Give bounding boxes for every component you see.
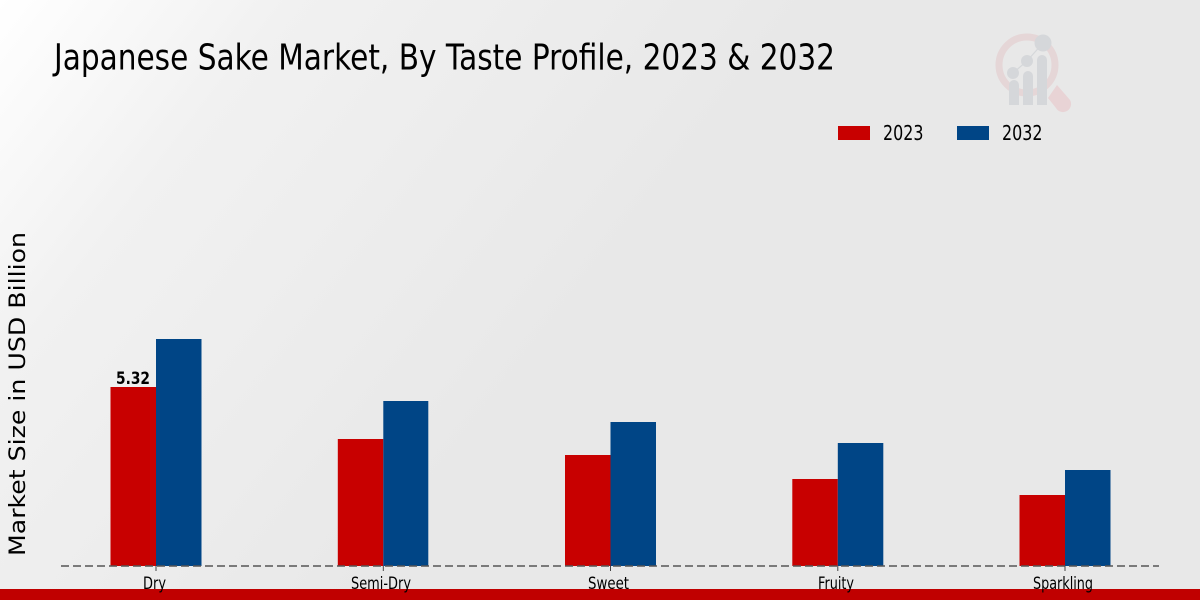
x axis baseline xyxy=(61,565,1159,567)
bars: Sparkling xyxy=(1020,470,1110,566)
category labels: Dry xyxy=(143,574,166,593)
y axis label: Market Size in USD Billion xyxy=(5,232,31,556)
category labels xyxy=(143,574,1093,593)
footer bar xyxy=(0,589,1200,600)
value label: 5.32 xyxy=(116,369,150,388)
category labels: Semi-Dry xyxy=(351,574,411,593)
legend xyxy=(838,121,1042,145)
bar chart xyxy=(61,339,1159,593)
bars: Fruity xyxy=(792,443,883,566)
category labels: Sweet xyxy=(588,574,629,593)
legend item: 2023 xyxy=(838,121,924,145)
icon: watermark logo xyxy=(999,34,1071,112)
bars: Sweet xyxy=(565,422,656,566)
legend item: 2032: 2032 xyxy=(1002,121,1042,145)
legend item: 2032 xyxy=(957,121,1042,145)
legend item: 2023: 2023 xyxy=(883,121,924,145)
title: Japanese Sake Market, By Taste Profile, 2023 & 2032 xyxy=(52,38,835,78)
category labels: Fruity xyxy=(818,574,854,593)
bars: Semi-Dry xyxy=(338,401,428,566)
bars: Dry xyxy=(110,339,202,566)
category labels: Sparkling xyxy=(1033,574,1093,593)
